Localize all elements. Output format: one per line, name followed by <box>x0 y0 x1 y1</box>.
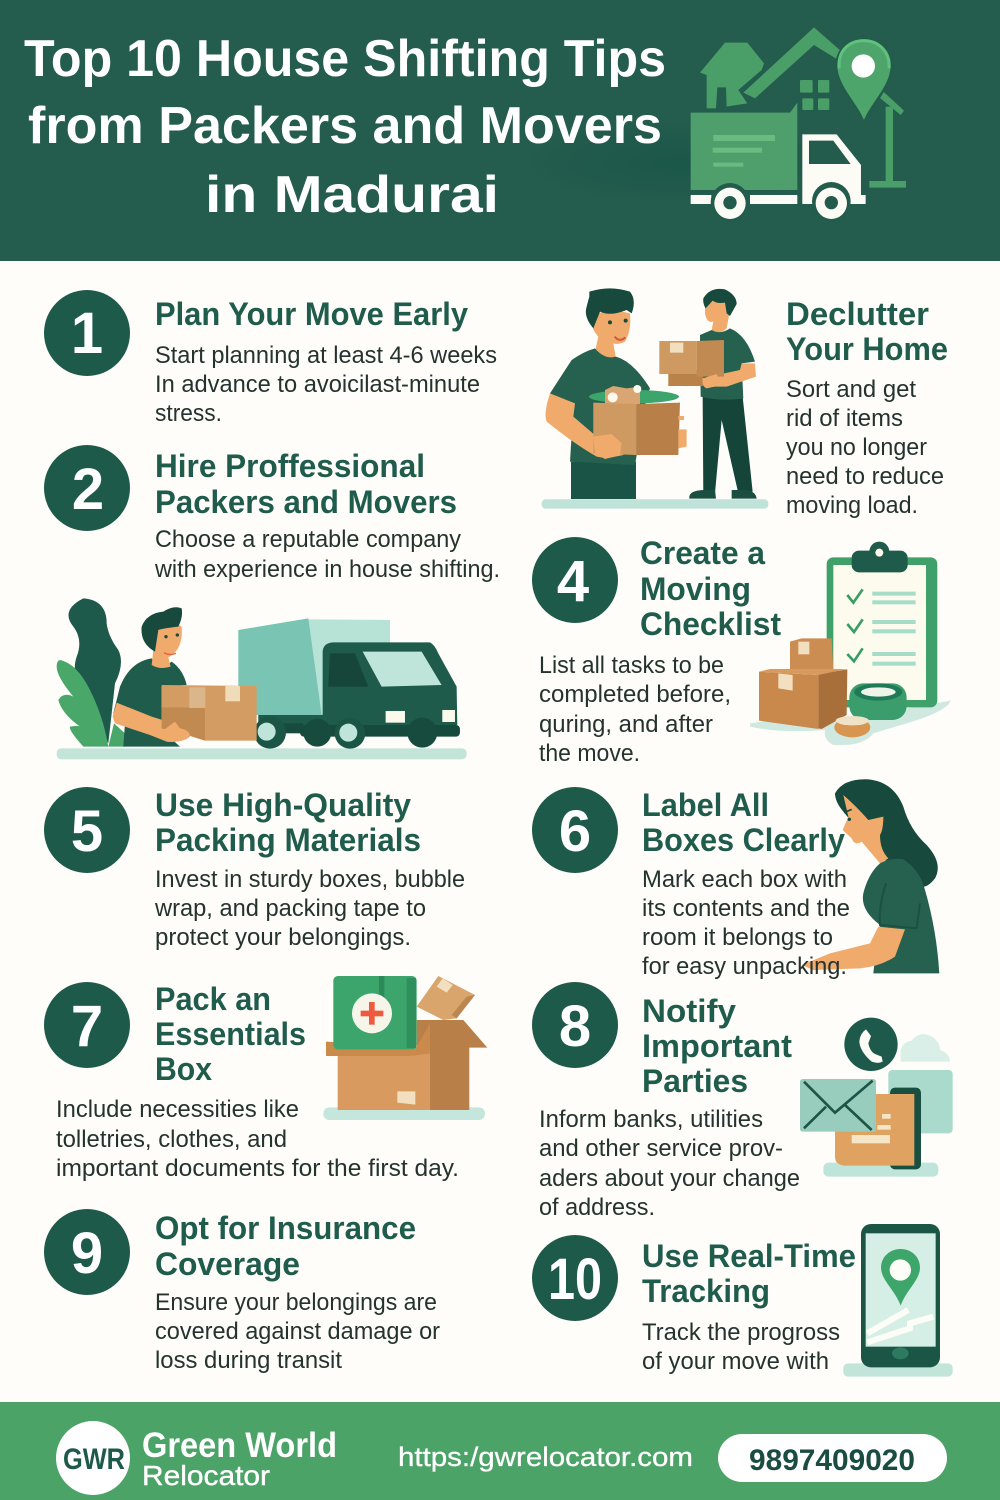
panel: step 10 use real-time tracking <box>532 1224 953 1377</box>
panel: step 3 declutter your home <box>542 288 948 519</box>
heading: create a moving checklist: Moving <box>640 571 751 607</box>
panel: step 9 opt for insurance coverage <box>44 1209 440 1374</box>
text: step 7 description: Include necessities like <box>56 1096 299 1123</box>
text: step 2 description: Choose a reputable company <box>155 526 461 553</box>
text: step 10 description: of your move with <box>642 1348 829 1375</box>
illustration: two movers holding boxes <box>542 288 768 509</box>
phone number pill: 9897409020 <box>749 1444 915 1477</box>
footer bar <box>0 1402 1000 1500</box>
illustration: first aid kit in cardboard box <box>323 976 487 1120</box>
heading: use real-time tracking: Use Real-Time <box>642 1238 856 1274</box>
text: step 6 description: for easy unpacking. <box>642 953 847 980</box>
number badge 9: 9 <box>71 1221 103 1286</box>
text: step 8 description: and other service prov- <box>539 1135 783 1162</box>
heading: label all boxes clearly: Boxes Clearly <box>642 822 845 858</box>
heading: pack an essentials box: Box <box>155 1051 212 1087</box>
number badge 4 <box>532 537 618 623</box>
text: step 4 description: quring, and after <box>539 711 713 738</box>
text: step 4 description: the move. <box>539 740 640 767</box>
heading: label all boxes clearly <box>642 787 845 858</box>
website url: https:/gwrelocator.com <box>398 1442 693 1472</box>
number badge 2 <box>44 445 130 531</box>
heading: notify important parties: Parties <box>642 1063 748 1099</box>
text: step 7 description: tolletries, clothes, and <box>56 1126 287 1153</box>
text: step 5 description: Invest in sturdy boxes, bubble <box>155 866 465 893</box>
text: step 4 description: List all tasks to be <box>539 652 724 679</box>
number badge 6 <box>532 787 618 873</box>
text: step 9 description: Ensure your belongings are <box>155 1289 437 1316</box>
header banner <box>0 0 1000 261</box>
heading: plan your move early: Plan Your Move Early <box>155 296 468 332</box>
illustration: clipboard, boxes and tape <box>750 542 951 745</box>
brand name: Green World <box>142 1426 337 1465</box>
logo: GWR badge <box>56 1421 130 1495</box>
text: step 1 description <box>155 342 497 427</box>
number badge 9 <box>44 1209 130 1295</box>
brand name <box>142 1426 337 1491</box>
heading: notify important parties: Important <box>642 1028 792 1064</box>
text: step 8 description <box>539 1106 800 1221</box>
heading: opt for insurance coverage <box>155 1210 416 1282</box>
heading: use high-quality packing materials <box>155 787 421 858</box>
text: step 9 description: covered against damage or <box>155 1318 440 1345</box>
text: step 4 description: completed before, <box>539 681 731 708</box>
text: step 5 description <box>154 866 465 951</box>
text: step 7 description <box>56 1096 459 1182</box>
heading: use high-quality packing materials: Packing Materials <box>155 822 421 858</box>
number badge 8 <box>532 982 618 1068</box>
text: step 2 description: with experience in house shifting. <box>154 556 500 583</box>
heading: use real-time tracking <box>642 1238 856 1309</box>
number badge 1 <box>44 290 130 376</box>
text: step 7 description: important documents for the first day. <box>56 1155 459 1182</box>
text: step 5 description: protect your belongings. <box>155 924 411 951</box>
text: step 8 description: Inform banks, utilities <box>539 1106 763 1133</box>
text: step 3 description: rid of items <box>786 405 903 432</box>
text: step 3 description <box>786 376 944 519</box>
number badge 8: 8 <box>559 994 591 1059</box>
title <box>24 30 666 224</box>
number badge 7 <box>44 982 130 1068</box>
heading: opt for insurance coverage: Opt for Insurance <box>155 1210 416 1246</box>
panel: step 8 notify important parties <box>532 982 953 1221</box>
number badge 4: 4 <box>557 549 589 614</box>
title: in Madurai <box>205 166 499 224</box>
text: step 2 description <box>154 526 500 583</box>
text: step 5 description: wrap, and packing tape to <box>154 895 426 922</box>
text: step 1 description: Start planning at least 4-6 weeks <box>155 342 497 369</box>
title: from Packers and Movers <box>28 97 662 155</box>
panel: step 1 plan your move early <box>44 290 497 427</box>
illustration: woman labelling a box <box>802 779 939 973</box>
text: step 6 description <box>642 866 850 980</box>
number badge 10: 10 <box>548 1247 602 1312</box>
brand name: Relocator <box>142 1460 270 1491</box>
text: step 6 description: room it belongs to <box>642 924 833 951</box>
text: step 8 description: of address. <box>539 1194 655 1221</box>
panel: step 2 hire professional packers <box>44 445 500 759</box>
heading: declutter your home: Your Home <box>786 331 948 367</box>
panel: step 7 pack an essentials box <box>44 976 487 1182</box>
text: step 3 description: moving load. <box>786 492 918 519</box>
phone number pill <box>718 1434 947 1482</box>
heading: use high-quality packing materials: Use High-Quality <box>155 787 411 823</box>
heading: opt for insurance coverage: Coverage <box>155 1246 300 1282</box>
text: step 3 description: you no longer <box>786 434 927 461</box>
logo: GWR badge: GWR <box>63 1443 125 1476</box>
text: step 8 description: aders about your change <box>539 1165 800 1192</box>
heading: declutter your home <box>786 296 948 367</box>
heading: label all boxes clearly: Label All <box>642 787 769 823</box>
heading: notify important parties: Notify <box>642 993 736 1029</box>
icon: smartphone with map pin <box>843 1224 953 1377</box>
panel: step 6 label all boxes clearly <box>532 779 939 980</box>
heading: create a moving checklist: Create a <box>640 535 765 571</box>
number badge 7: 7 <box>71 994 103 1059</box>
text: step 9 description <box>155 1289 440 1374</box>
heading: notify important parties <box>642 993 792 1099</box>
text: step 6 description: its contents and the <box>642 895 850 922</box>
text: step 10 description <box>642 1319 840 1375</box>
panel: step 4 create a moving checklist <box>532 535 951 767</box>
text: step 10 description: Track the progross <box>642 1319 840 1346</box>
heading: hire proffessional packers and movers <box>155 448 457 520</box>
heading: declutter your home: Declutter <box>786 296 929 332</box>
illustration: mover with box and truck <box>57 598 467 759</box>
heading: hire proffessional packers and movers: Packers and Movers <box>155 484 457 520</box>
text: step 6 description: Mark each box with <box>642 866 847 893</box>
number badge 1: 1 <box>71 301 103 366</box>
heading: create a moving checklist: Checklist <box>640 606 781 642</box>
text: step 1 description: stress. <box>155 400 222 427</box>
text: step 4 description <box>539 652 731 767</box>
text: step 9 description: loss during transit <box>155 1347 342 1374</box>
heading: pack an essentials box: Pack an <box>155 981 271 1017</box>
heading: pack an essentials box: Essentials <box>155 1016 306 1052</box>
heading: use real-time tracking: Tracking <box>642 1273 770 1309</box>
number badge 10 <box>532 1235 618 1321</box>
number badge 6: 6 <box>559 799 591 864</box>
number badge 2: 2 <box>72 457 104 522</box>
title: Top 10 House Shifting Tips <box>24 30 666 88</box>
number badge 5: 5 <box>71 799 103 864</box>
panel: step 5 use high-quality packing materials <box>44 787 465 951</box>
illustration: phone, envelope and parcel icons <box>800 1018 953 1177</box>
number badge 5 <box>44 787 130 873</box>
heading: create a moving checklist <box>640 535 781 642</box>
heading: pack an essentials box <box>155 981 306 1087</box>
heading: hire proffessional packers and movers: Hire Proffessional <box>155 448 425 484</box>
text: step 3 description: Sort and get <box>786 376 916 403</box>
icon: moving truck, house and location pin <box>691 27 906 222</box>
text: step 1 description: In advance to avoicilast-minute <box>155 371 480 398</box>
text: step 3 description: need to reduce <box>786 463 944 490</box>
